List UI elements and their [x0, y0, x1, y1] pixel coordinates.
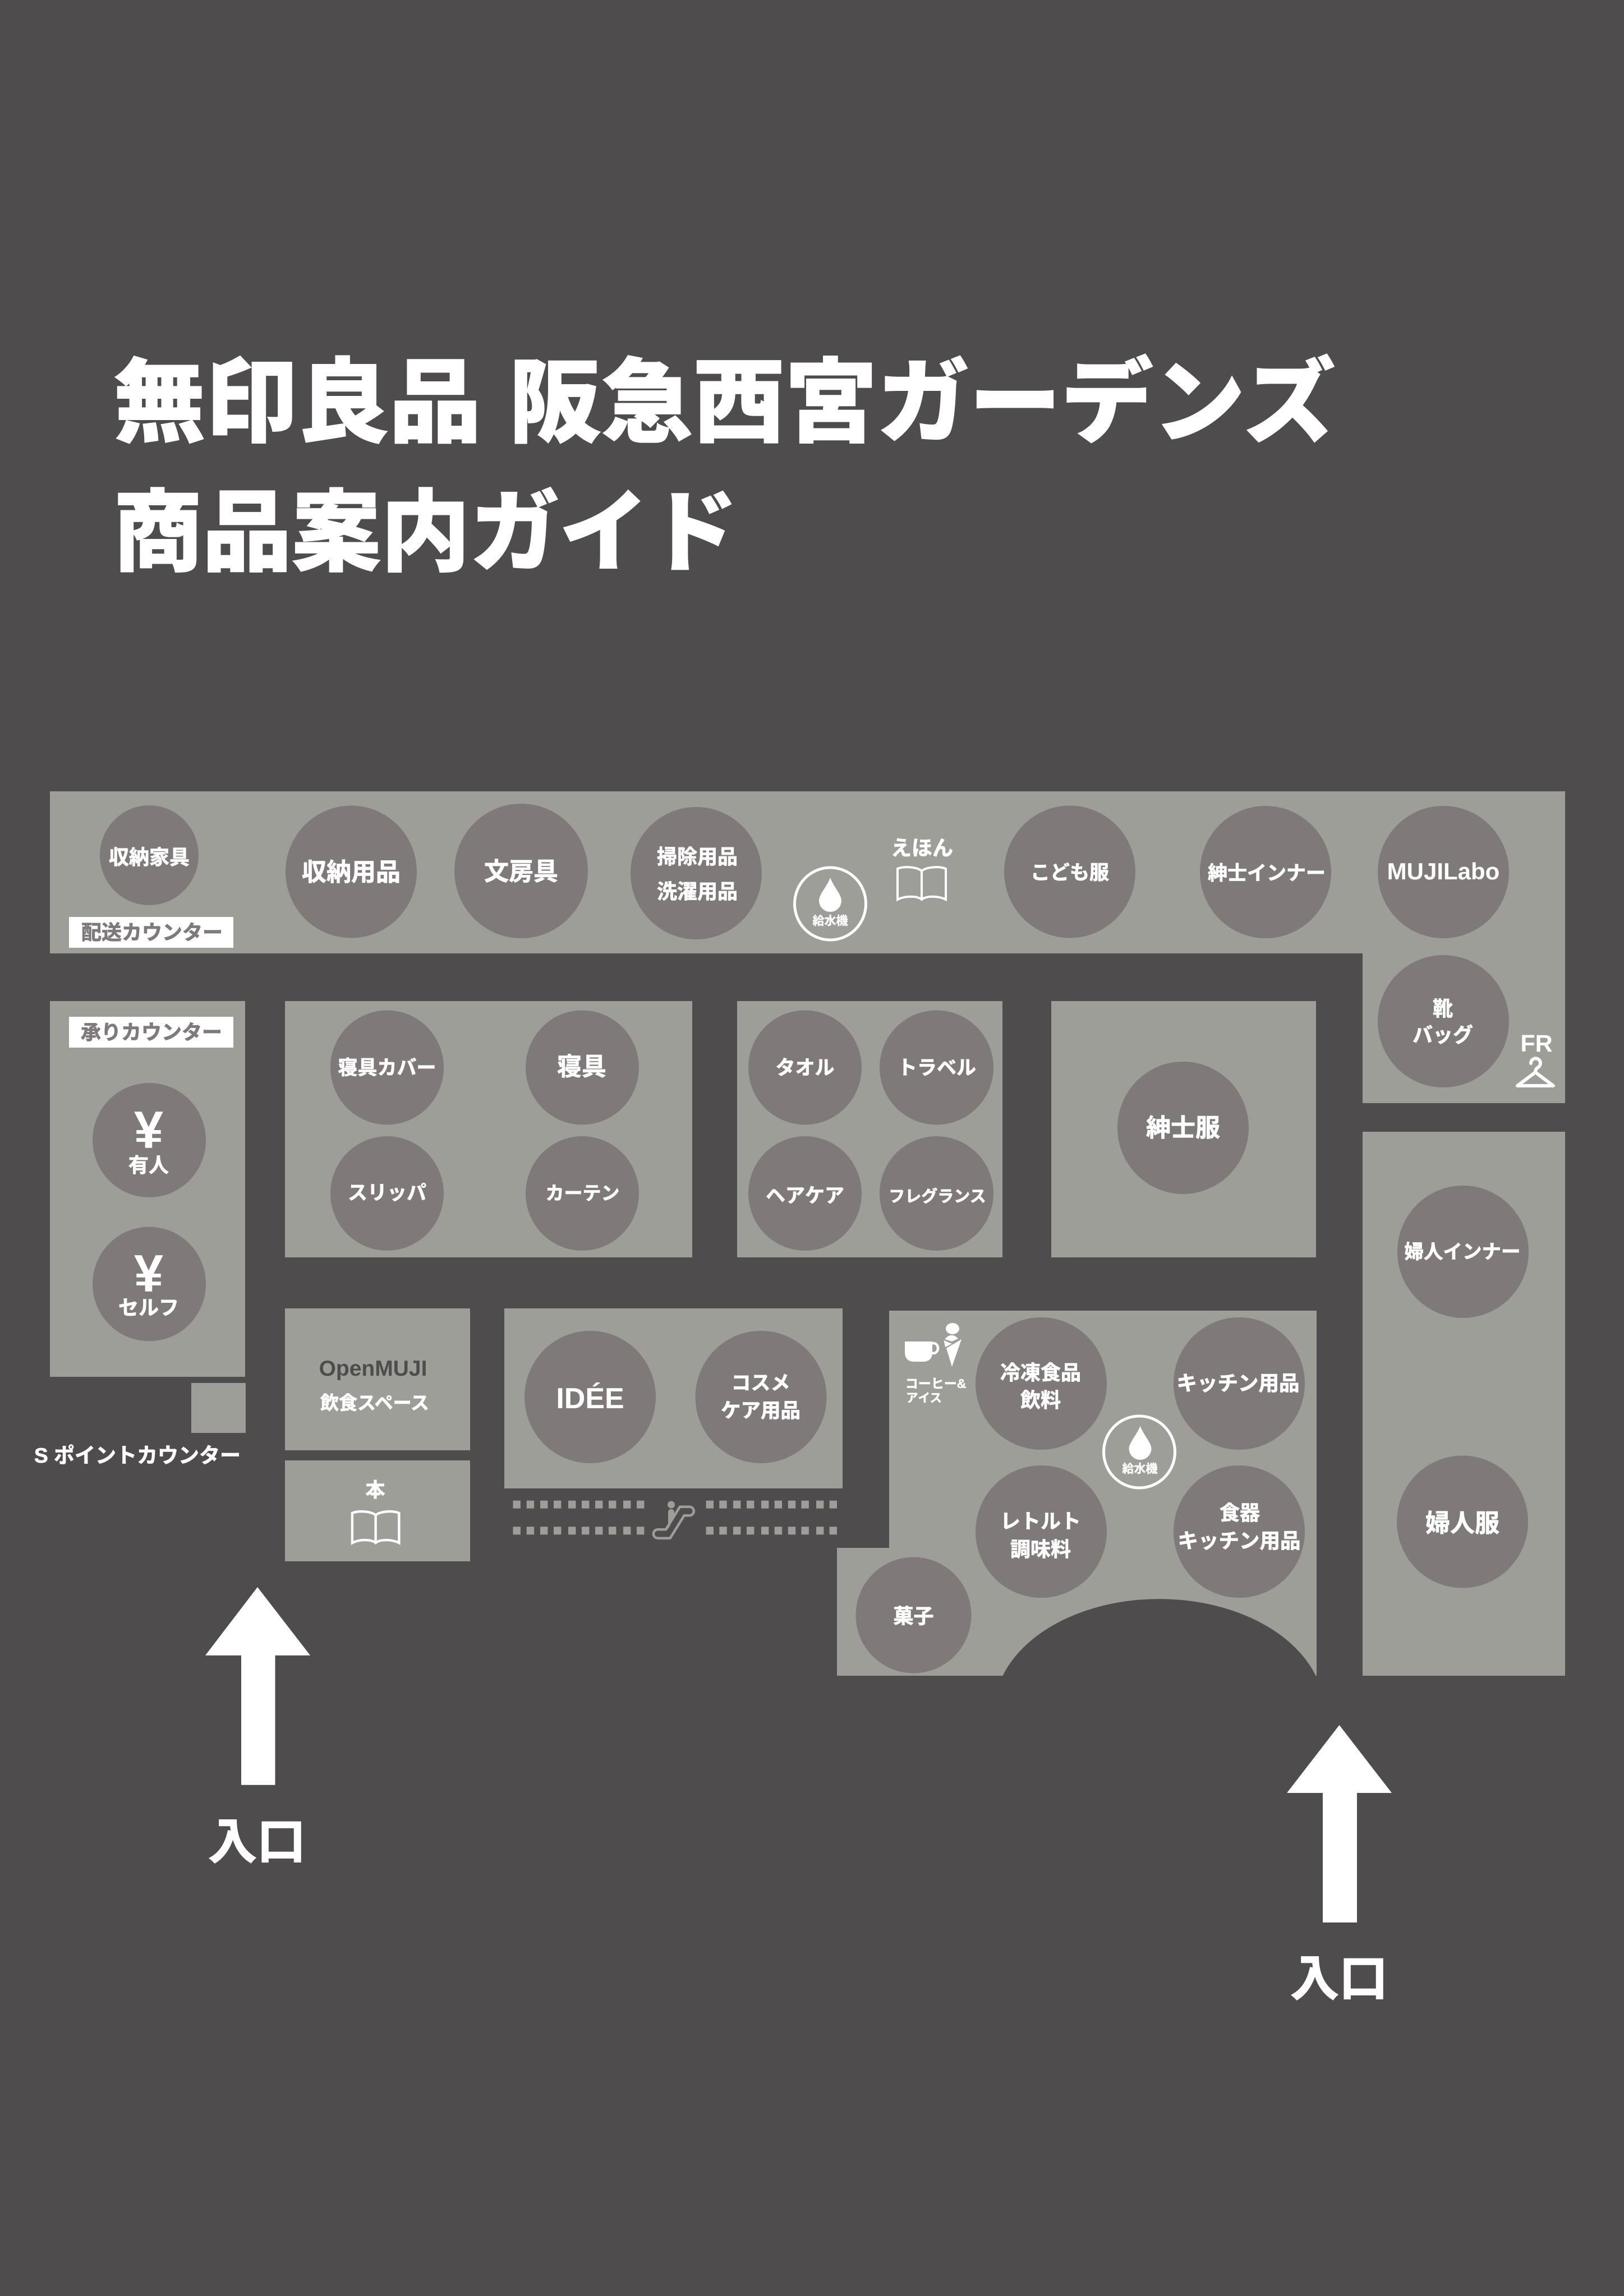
icon: coffee cup [905, 1341, 938, 1362]
label: S point counter: S ポイントカウンター [34, 1444, 241, 1467]
circle: slippers [330, 1136, 444, 1251]
panel: IDEE and cosmetics [504, 1308, 843, 1488]
circle: IDEE: IDÉE [556, 1382, 624, 1415]
panel: Open MUJI: OpenMUJI [319, 1357, 427, 1381]
arrow: left entrance [205, 1587, 310, 1785]
label: fitting room: FR [1520, 1030, 1553, 1057]
circle: towels [748, 1011, 862, 1125]
circle: cosmetics and care [696, 1331, 827, 1463]
circle: kids clothing: こども服 [1030, 862, 1109, 884]
panel: food and kitchen [837, 1311, 1317, 1676]
panel: towels and travel [737, 1001, 1002, 1257]
circle: MUJI Labo [1378, 806, 1509, 938]
circle: women's clothing [1397, 1456, 1528, 1588]
label: picture books: えほん [891, 837, 953, 860]
panel: women's clothing [1363, 1132, 1565, 1676]
circle: bedding covers [330, 1011, 444, 1125]
title: 商品案内ガイド [113, 483, 738, 583]
circle: shoes and bags: 靴 [1433, 997, 1453, 1020]
circle: cosmetics and care: ケア用品 [721, 1399, 801, 1422]
icon: open book [352, 1511, 399, 1543]
icon: water dispenser: 給水機 [1122, 1463, 1158, 1476]
label: order counter [69, 1017, 233, 1048]
circle: self register [93, 1227, 206, 1341]
circle: frozen food and drinks: 冷凍食品 [1000, 1361, 1081, 1384]
label: coffee and ice cream: アイス [906, 1391, 942, 1405]
label: coffee and ice cream [905, 1376, 966, 1405]
icon: water dispenser: 給水機 [812, 915, 848, 928]
circle: travel [880, 1011, 993, 1125]
icon: ice cream cone [944, 1323, 961, 1367]
circle: tableware and kitchen goods [1174, 1465, 1305, 1598]
circle: women's innerwear [1397, 1186, 1529, 1318]
circle: curtains [526, 1136, 639, 1251]
circle: shoes and bags [1378, 955, 1509, 1087]
panel: top L-shaped sales floor [50, 791, 1565, 1103]
circle: stationery: 文房具 [484, 858, 558, 886]
circle: storage furniture: 収納家具 [109, 846, 190, 869]
circle: IDEE [525, 1331, 656, 1463]
circle: frozen food and drinks: 飲料 [1020, 1389, 1061, 1412]
circle: MUJI Labo: MUJILabo [1387, 858, 1499, 884]
circle: kitchen goods: キッチン用品 [1177, 1372, 1299, 1395]
icon: water dispenser [1104, 1416, 1175, 1488]
label: right entrance: 入口 [1290, 1952, 1388, 2006]
circle: cleaning and laundry goods: 洗濯用品 [657, 880, 738, 903]
circle: staffed register: ¥ [134, 1100, 163, 1159]
circle: staffed register [93, 1083, 206, 1197]
circle: curtains: カーテン [545, 1183, 619, 1204]
circle: retort food and seasonings: レトルト [1000, 1510, 1081, 1533]
circle: towels: タオル [775, 1057, 835, 1079]
circle: cosmetics and care: コスメ [731, 1372, 790, 1394]
circle: men's clothing [1117, 1062, 1249, 1194]
escalator guide [513, 1501, 837, 1538]
circle: men's innerwear: 紳士インナー [1208, 863, 1326, 884]
circle: sweets: 菓子 [893, 1605, 934, 1628]
title: 無印良品 阪急西宮ガーデンズ [113, 352, 1335, 454]
icon: water dispenser [794, 868, 866, 940]
circle: hair care [748, 1136, 862, 1251]
circle: storage goods: 収納用品 [302, 859, 401, 886]
circle: women's clothing: 婦人服 [1425, 1510, 1499, 1537]
circle: tableware and kitchen goods: 食器 [1220, 1501, 1260, 1524]
panel: books [285, 1460, 470, 1561]
panel: bedding [285, 1001, 692, 1257]
circle: bedding: 寝具 [557, 1053, 606, 1081]
circle: kids clothing [1004, 805, 1135, 938]
circle: slippers: スリッパ [348, 1182, 426, 1204]
icon: open book [898, 867, 946, 900]
circle: tableware and kitchen goods: キッチン用品 [1178, 1529, 1300, 1552]
label: coffee and ice cream: コーヒー& [905, 1376, 966, 1391]
circle: sweets [856, 1557, 972, 1673]
label: left entrance: 入口 [208, 1815, 306, 1869]
panel: men's clothing [1051, 1001, 1316, 1257]
circle: frozen food and drinks [976, 1317, 1107, 1450]
panel: S point counter block [191, 1383, 246, 1433]
label: delivery counter: 配送カウンター [81, 921, 223, 944]
circle: retort food and seasonings: 調味料 [1010, 1538, 1071, 1561]
circle: storage goods [286, 805, 417, 938]
circle: fragrance: フレグランス [889, 1187, 986, 1206]
circle: self register: セルフ [118, 1296, 179, 1319]
label: delivery counter [69, 917, 233, 948]
icon: hanger [1517, 1058, 1553, 1086]
arrow: right entrance [1287, 1725, 1392, 1922]
circle: women's innerwear: 婦人インナー [1405, 1242, 1520, 1263]
circle: stationery [454, 804, 588, 938]
circle: self register: ¥ [134, 1244, 163, 1303]
circle: kitchen goods [1174, 1317, 1305, 1450]
panel: books: 本 [365, 1479, 385, 1501]
circle: storage furniture [100, 805, 199, 905]
panel: payment counters [50, 1001, 245, 1377]
panel: Open MUJI [285, 1308, 470, 1450]
circle: cleaning and laundry goods [631, 807, 762, 939]
panel: Open MUJI: 飲食スペース [320, 1393, 429, 1413]
circle: retort food and seasonings [976, 1465, 1107, 1598]
icon: escalator [654, 1501, 694, 1538]
circle: travel: トラベル [898, 1057, 976, 1079]
title [113, 352, 1335, 583]
circle: staffed register: 有人 [128, 1154, 169, 1177]
circle: cleaning and laundry goods: 掃除用品 [657, 845, 738, 868]
circle: bedding [526, 1011, 639, 1125]
circle: bedding covers: 寝具カバー [338, 1057, 436, 1079]
circle: fragrance [880, 1136, 993, 1251]
circle: hair care: ヘアケア [766, 1185, 844, 1207]
circle: men's clothing: 紳士服 [1146, 1114, 1220, 1142]
circle: men's innerwear [1200, 806, 1331, 938]
circle: shoes and bags: バッグ [1413, 1023, 1473, 1046]
label: order counter: 承りカウンター [81, 1021, 222, 1044]
